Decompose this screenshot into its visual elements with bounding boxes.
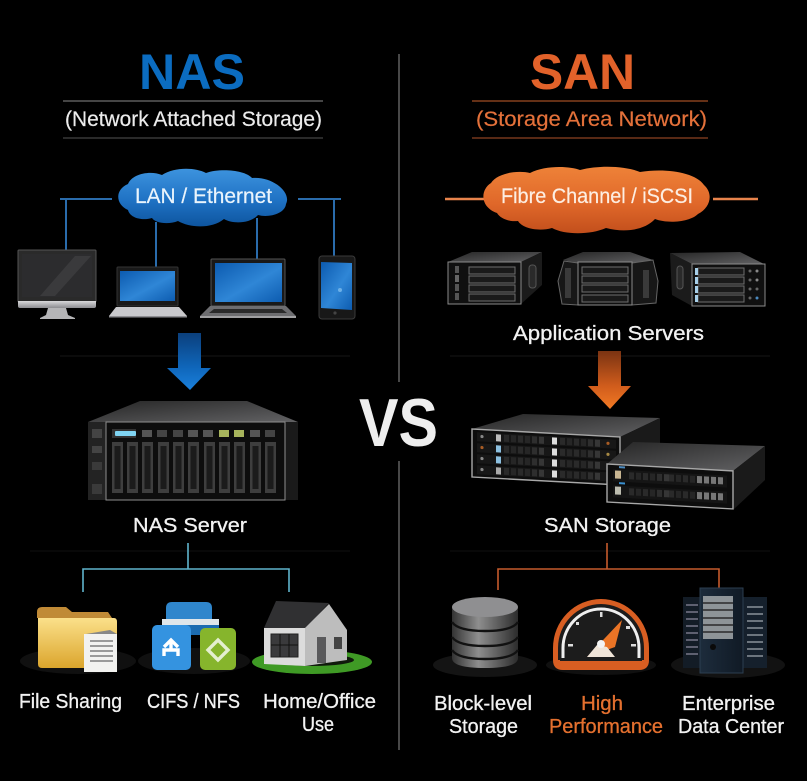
tree lines: NAS <box>83 543 289 592</box>
label: Block-level Storage: Block-level <box>434 693 532 715</box>
tree lines: SAN <box>498 543 719 590</box>
icon: application server right <box>670 252 765 306</box>
heading: SAN <box>472 44 708 138</box>
label: Home/Office Use: Use <box>302 714 334 736</box>
icon: database cylinder <box>433 597 537 677</box>
heading: NAS <box>63 44 323 138</box>
label: Enterprise Data Center: Data Center <box>678 716 784 738</box>
icon: data center racks <box>671 588 785 678</box>
cloud: LAN / Ethernet: LAN / Ethernet <box>135 185 272 208</box>
icon: SAN storage rack small <box>607 442 765 510</box>
icon: CIFS / NFS <box>138 602 250 674</box>
SAN subtitle: (Storage Area Network) <box>476 107 707 131</box>
label: High Performance: Performance <box>549 716 663 738</box>
label: SAN Storage: SAN Storage <box>544 515 671 537</box>
heading: SAN: SAN <box>530 44 635 100</box>
label: File Sharing: File Sharing <box>19 691 122 713</box>
VS label: VS <box>359 385 438 461</box>
label: Block-level Storage: Storage <box>449 716 518 738</box>
icon: SAN storage rack large <box>472 414 660 485</box>
label: High Performance <box>549 693 663 738</box>
NAS subtitle: (Network Attached Storage) <box>65 107 322 131</box>
label: Enterprise Data Center <box>678 693 784 738</box>
network lines: SAN <box>445 198 758 200</box>
icon: NAS server <box>88 401 298 500</box>
icon: laptop dark <box>200 259 296 318</box>
network lines: NAS <box>60 199 341 268</box>
icon: tablet <box>319 256 355 319</box>
cloud: Fibre Channel / iSCSI: Fibre Channel / iSCSI <box>501 185 693 208</box>
label: Block-level Storage <box>434 693 532 738</box>
cloud: Fibre Channel / iSCSI <box>483 167 710 233</box>
icon: laptop silver <box>109 267 187 318</box>
label: High Performance: High <box>581 693 623 715</box>
label: Application Servers: Application Servers <box>513 323 704 345</box>
arrow: SAN down <box>588 351 631 409</box>
icon: file folder <box>20 607 136 674</box>
label: Enterprise Data Center: Enterprise <box>682 693 775 715</box>
heading: NAS: NAS <box>139 44 245 100</box>
arrow: NAS down <box>167 333 211 390</box>
icon: application server centre <box>558 252 658 305</box>
icon: house <box>252 601 372 674</box>
label: Home/Office Use: Home/Office <box>263 691 376 713</box>
icon: application server left <box>448 252 542 304</box>
centre divider <box>398 54 400 750</box>
cloud: LAN / Ethernet <box>118 169 287 226</box>
label: Home/Office Use <box>263 691 376 736</box>
icon: desktop monitor <box>18 250 96 319</box>
label: CIFS / NFS: CIFS / NFS <box>147 691 240 713</box>
icon: performance gauge <box>546 599 656 675</box>
label: NAS Server: NAS Server <box>133 515 247 537</box>
